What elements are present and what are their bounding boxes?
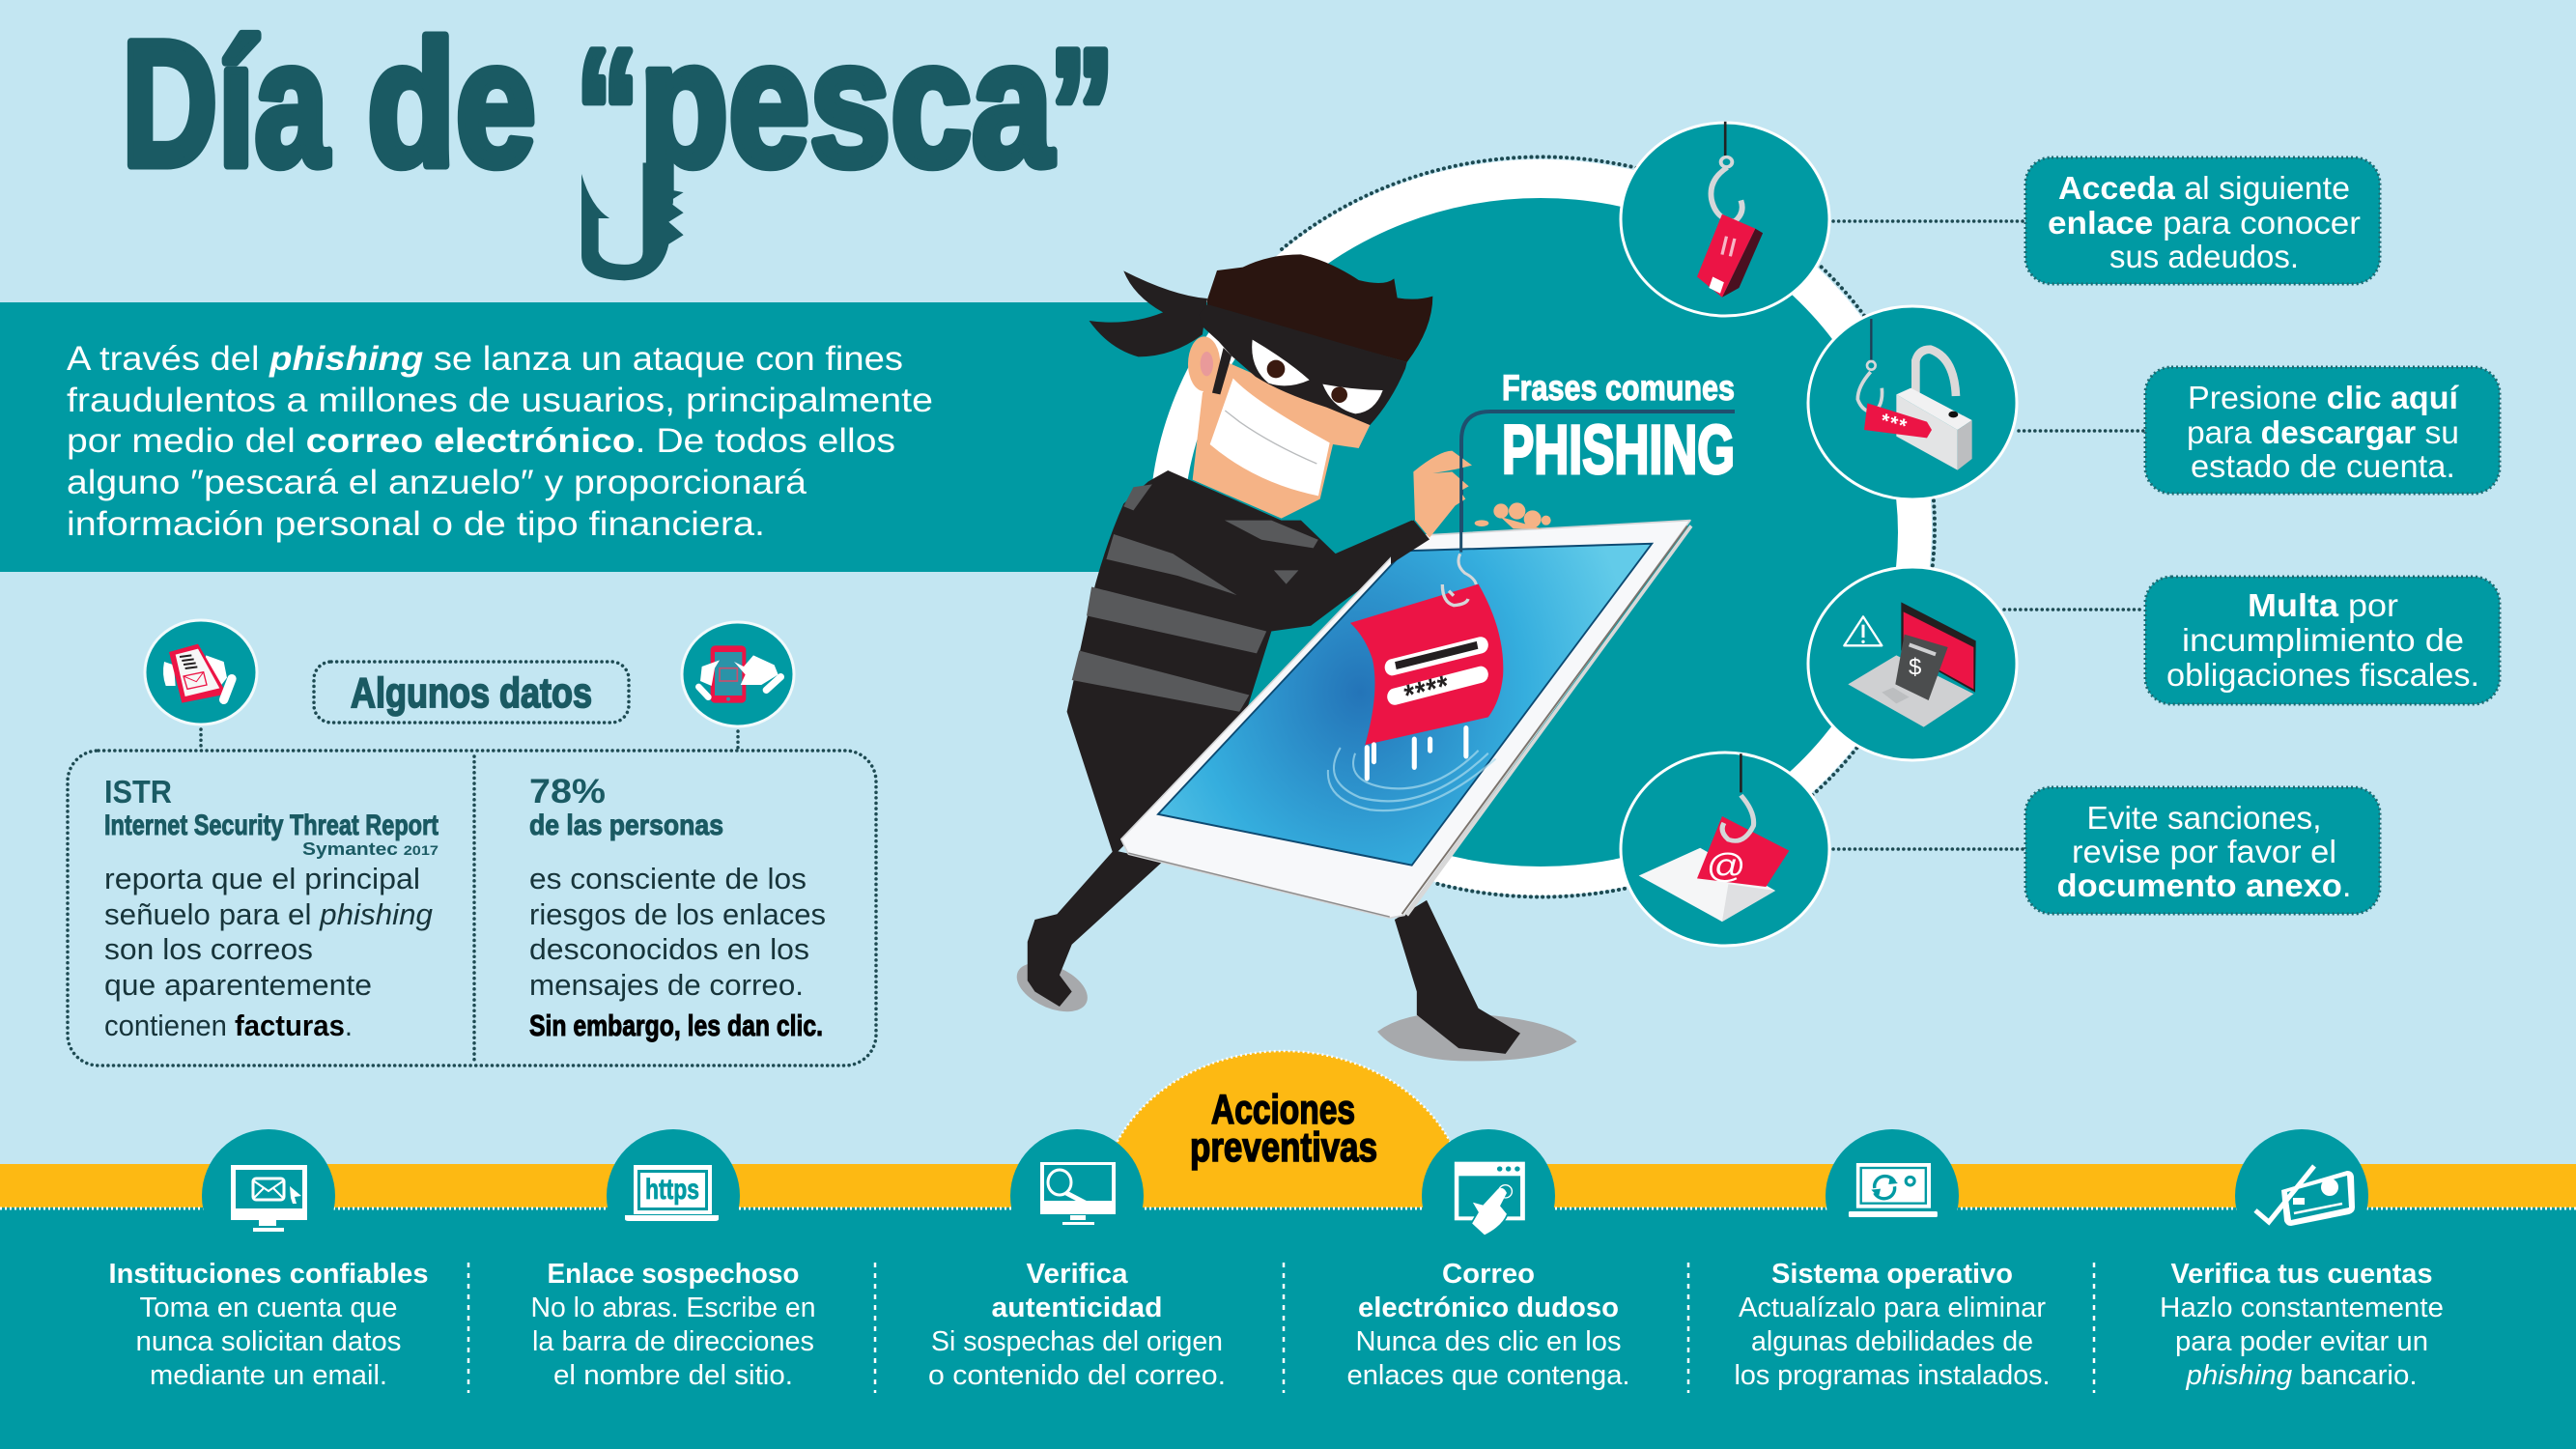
- icon: laptop update: [1849, 1163, 1938, 1217]
- action: verifica autenticidad: o contenido del correo.: [928, 1360, 1226, 1391]
- action: verifica autenticidad: Si sospechas del origen: [931, 1326, 1223, 1357]
- column: 78%: [529, 773, 826, 1042]
- callout: evite: [2025, 787, 2380, 914]
- intro text: por medio del correo electrónico . De todos ellos: [67, 421, 895, 460]
- action: correo dudoso: enlaces que contenga.: [1346, 1360, 1630, 1391]
- icon circle: envelope: @: [1707, 847, 1746, 886]
- callout: presione: [2145, 367, 2500, 494]
- action: correo dudoso: Nunca des clic en los: [1356, 1326, 1621, 1357]
- action: sistema operativo: algunas debilidades de: [1751, 1326, 2033, 1357]
- panel: data box: [68, 729, 876, 1065]
- red login card: ****: [1401, 668, 1453, 713]
- action: enlace sospechoso: No lo abras. Escribe en: [531, 1293, 815, 1323]
- title: Día: [122, 5, 330, 204]
- action: instituciones confiables: [108, 1259, 429, 1391]
- icon tabs: [202, 1129, 2368, 1263]
- callout: evite: revise por favor el: [2072, 834, 2336, 869]
- callout: acceda: Acceda al siguiente: [2058, 170, 2350, 206]
- legs: [1028, 850, 1520, 1054]
- icon: title fish hook: [581, 163, 684, 280]
- panel: intro band: [0, 302, 1256, 572]
- action: correo dudoso: electrónico dudoso: [1358, 1293, 1619, 1323]
- icon circle: envelope: [1621, 753, 1829, 946]
- intro text: información personal o de tipo financiera.: [67, 504, 765, 543]
- callout: presione: estado de cuenta.: [2191, 448, 2455, 484]
- heading: frases comunes phishing: [1461, 368, 1735, 541]
- action: verifica tus cuentas: para poder evitar un: [2175, 1326, 2428, 1357]
- column: ISTR: [104, 774, 439, 1042]
- headband ties: [1090, 270, 1207, 356]
- action: verifica autenticidad: autenticidad: [991, 1293, 1163, 1323]
- column: ISTR: ISTR: [104, 774, 172, 810]
- heading: frases comunes phishing: PHISHING: [1502, 412, 1735, 489]
- sweater stripes: [1072, 484, 1318, 712]
- intro text: [67, 339, 933, 543]
- icon: laptop https: https: [645, 1174, 699, 1206]
- action: correo dudoso: Correo: [1442, 1259, 1535, 1290]
- column: ISTR: Symantec 2017: [302, 839, 439, 859]
- footer bands: [0, 1051, 2576, 1449]
- column: 78%: es consciente de los: [529, 862, 807, 895]
- panel: phishing circle: [1149, 156, 1935, 897]
- action: instituciones confiables: Instituciones confiables: [108, 1259, 429, 1290]
- action: enlace sospechoso: la barra de direcciones: [532, 1326, 814, 1357]
- heading: frases comunes phishing: Frases comunes: [1502, 368, 1735, 408]
- icon circle: laptop with invoice: [1808, 567, 2017, 760]
- action: instituciones confiables: nunca solicitan datos: [135, 1326, 402, 1357]
- icon: hand, fingers and fishing line: [1391, 444, 1551, 606]
- callout: multa: incumplimiento de: [2182, 622, 2464, 658]
- connector lines: [1833, 221, 2143, 849]
- icon: thief with tablet: [1011, 270, 1691, 1061]
- intro text: A través del phishing se lanza un ataque con fines: [67, 339, 903, 378]
- icon circle: padlock: ***: [1878, 410, 1911, 439]
- torso: [1067, 470, 1430, 856]
- column: 78%: riesgos de los enlaces: [529, 897, 826, 931]
- action: verifica autenticidad: [928, 1259, 1226, 1391]
- column: ISTR: que aparentemente: [104, 968, 372, 1002]
- callout: multa: obligaciones fiscales.: [2166, 657, 2479, 693]
- action: enlace sospechoso: el nombre del sitio.: [553, 1360, 793, 1391]
- action: verifica tus cuentas: phishing bancario.: [2185, 1360, 2417, 1391]
- icon: window and hand: [1455, 1162, 1525, 1236]
- heading: algunos datos: [314, 662, 629, 723]
- column: ISTR: contienen facturas.: [104, 1009, 353, 1042]
- column: ISTR: señuelo para el phishing: [104, 897, 433, 931]
- icon circle: laptop with invoice: $: [1909, 654, 1921, 680]
- callout: acceda: [2025, 157, 2380, 284]
- heading: acciones preventivas: preventivas: [1190, 1124, 1377, 1171]
- column: 78%: Sin embargo, les dan clic.: [529, 1009, 823, 1042]
- heading: algunos datos: Algunos datos: [351, 669, 592, 717]
- icon circle: credit card on hook: [1621, 122, 1829, 316]
- callout: evite: Evite sanciones,: [2086, 800, 2322, 836]
- column: 78%: de las personas: [529, 810, 723, 841]
- column: 78%: desconocidos en los: [529, 932, 809, 966]
- icon: hand tapping phone: [682, 622, 794, 726]
- tablet: [1121, 521, 1690, 918]
- callout: presione: para descargar su: [2187, 414, 2459, 450]
- action: verifica tus cuentas: Hazlo constantemente: [2160, 1293, 2444, 1323]
- title: [122, 5, 1115, 213]
- action: correo dudoso: [1346, 1259, 1630, 1391]
- callout: evite: documento anexo .: [2057, 867, 2351, 903]
- thief head: [1188, 254, 1432, 519]
- callout: acceda: sus adeudos.: [2109, 239, 2299, 274]
- column: ISTR: reporta que el principal: [104, 862, 420, 895]
- callout: acceda: enlace para conocer: [2048, 205, 2361, 241]
- action: verifica tus cuentas: [2160, 1259, 2444, 1391]
- column: 78%: mensajes de correo.: [529, 968, 804, 1002]
- foot shadows: [1011, 953, 1577, 1061]
- action: enlace sospechoso: [531, 1259, 815, 1391]
- callout: presione: Presione clic aquí: [2188, 380, 2460, 415]
- heading: acciones preventivas: Acciones: [1211, 1087, 1355, 1133]
- action: sistema operativo: los programas instalados.: [1735, 1360, 2050, 1391]
- icon: monitor envelope: [231, 1165, 307, 1232]
- icon: invoice on phone: [145, 620, 257, 724]
- action: verifica autenticidad: Verifica: [1026, 1259, 1128, 1290]
- title: “: [576, 14, 639, 213]
- callout: multa: Multa por: [2248, 587, 2398, 623]
- intro text: fraudulentos a millones de usuarios, principalmente: [67, 381, 933, 419]
- icon: laptop https: [625, 1165, 719, 1221]
- icon: card check: [2255, 1166, 2355, 1226]
- tablet screen: [1158, 544, 1652, 866]
- intro text: alguno ″pescará el anzuelo″ y proporcionará: [67, 463, 807, 501]
- column: 78%: 78%: [529, 773, 606, 810]
- icon circle: padlock: [1808, 306, 2017, 499]
- title: pesca: [639, 5, 1055, 204]
- column: ISTR: Internet Security Threat Report: [104, 810, 439, 841]
- action: instituciones confiables: mediante un email.: [150, 1360, 387, 1391]
- callout: multa: [2145, 577, 2500, 704]
- ripples: [1328, 748, 1495, 810]
- heading: acciones preventivas: [1190, 1087, 1377, 1171]
- action: verifica tus cuentas: Verifica tus cuentas: [2171, 1259, 2432, 1290]
- action: sistema operativo: [1735, 1259, 2050, 1391]
- column dividers: [468, 1263, 2094, 1393]
- action: sistema operativo: Actualízalo para eliminar: [1739, 1293, 2046, 1323]
- red login card: [1350, 584, 1503, 779]
- action: instituciones confiables: Toma en cuenta que: [139, 1293, 398, 1323]
- action: enlace sospechoso: Enlace sospechoso: [547, 1259, 800, 1290]
- column: ISTR: son los correos: [104, 932, 313, 966]
- icon: monitor magnifier: [1040, 1162, 1116, 1225]
- title: ”: [1049, 14, 1115, 213]
- action: sistema operativo: Sistema operativo: [1771, 1259, 2013, 1290]
- title: de: [367, 5, 536, 204]
